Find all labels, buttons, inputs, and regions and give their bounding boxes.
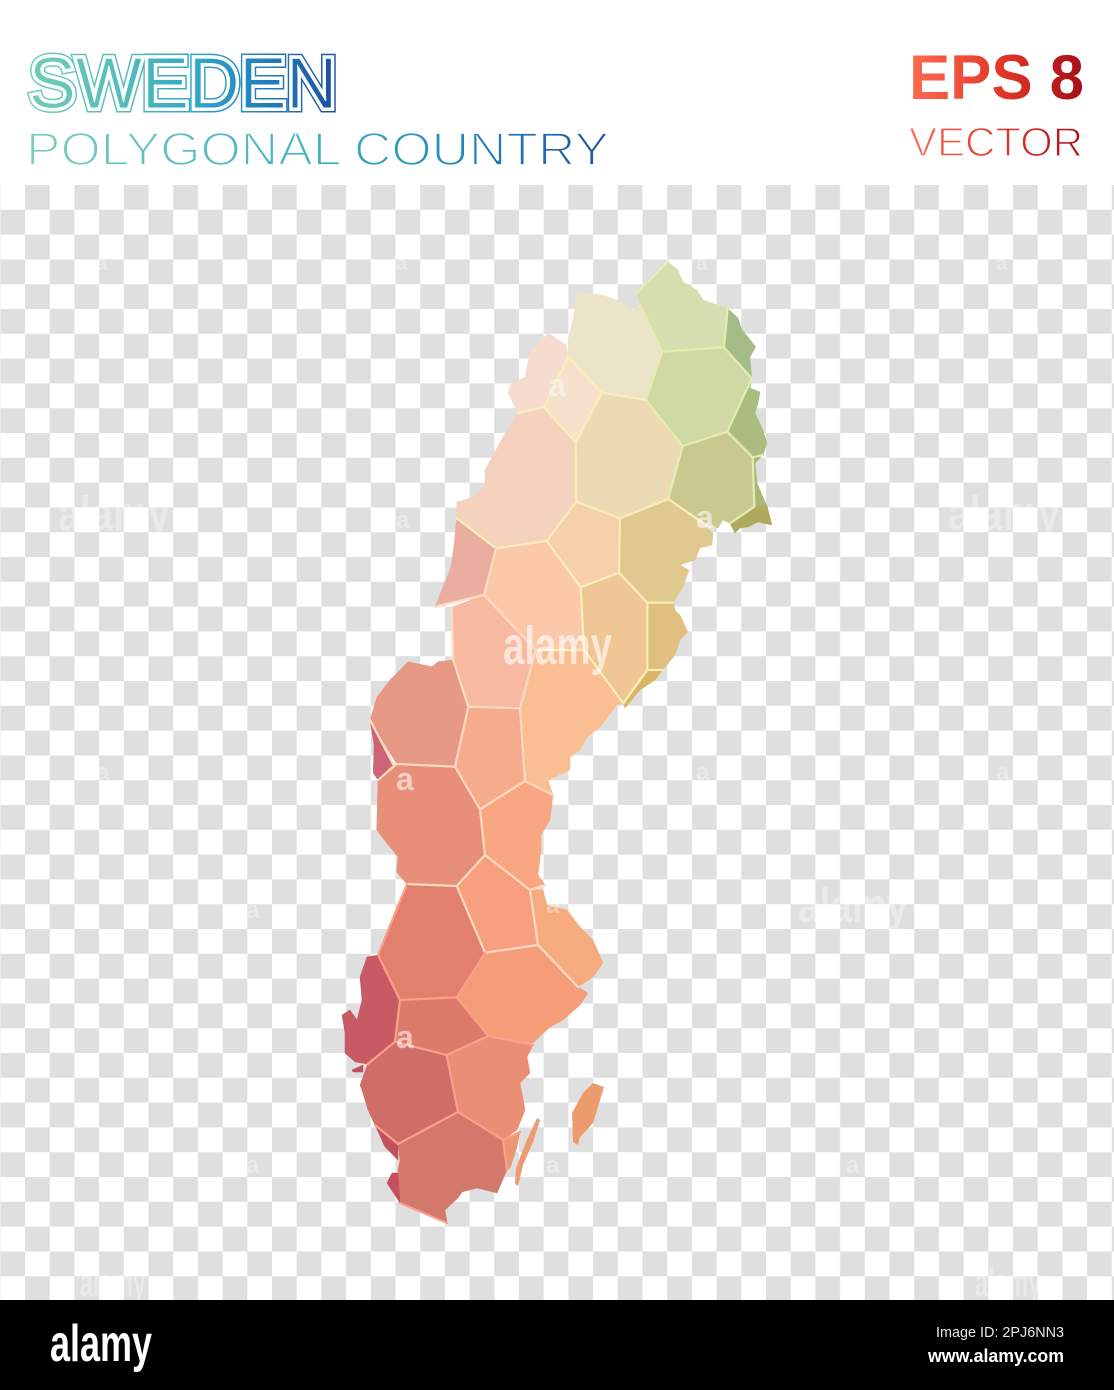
watermarks: faint repeats <box>58 253 1060 1305</box>
title: SWEDEN: SWEDEN <box>29 44 337 124</box>
watermarks: faint repeats: a <box>696 253 708 275</box>
watermarks: faint repeats: a <box>396 761 414 797</box>
watermarks: faint repeats: a <box>96 253 108 275</box>
island: Gotland <box>572 1083 604 1145</box>
watermarks: faint repeats: alamy <box>58 488 170 541</box>
island: Öland <box>515 1118 540 1186</box>
badge: EPS 8: EPS 8 <box>909 43 1084 113</box>
watermarks: faint repeats: a <box>846 1152 860 1179</box>
watermarks: faint repeats: a <box>546 1152 560 1179</box>
watermarks: faint repeats: alamy <box>975 1261 1041 1305</box>
watermarks: faint repeats: a <box>396 1019 414 1055</box>
watermarks: faint repeats: a <box>246 897 260 924</box>
badge: VECTOR: VECTOR <box>909 119 1083 165</box>
watermarks: faint repeats: a <box>548 367 566 403</box>
watermarks: faint repeats: a <box>996 253 1008 275</box>
region cells: north <box>457 262 772 548</box>
footer bar <box>0 1300 1114 1390</box>
footer: image id: Image ID: 2PJ6NN3 <box>936 1324 1064 1341</box>
polygon edges <box>368 262 763 1223</box>
watermarks: faint repeats: a <box>396 253 408 275</box>
watermarks: faint repeats: alamy <box>798 880 908 933</box>
watermarks: faint repeats: a <box>396 507 410 534</box>
watermarks: faint repeats: a <box>696 759 710 786</box>
watermarks: faint repeats: alamy <box>80 1261 146 1305</box>
watermark: central alamy: alamy <box>503 616 612 676</box>
watermarks: faint repeats: a <box>96 759 110 786</box>
title: SWEDEN: SWEDEN <box>29 44 337 124</box>
title: SWEDEN: SWEDEN <box>29 44 337 124</box>
footer: website: www.alamy.com <box>927 1346 1064 1366</box>
map: Sweden polygonal regions <box>342 262 772 1223</box>
region cells: south <box>342 884 603 1223</box>
watermarks: faint repeats: alamy <box>948 488 1060 541</box>
subtitle: POLYGONAL COUNTRY: POLYGONAL COUNTRY <box>26 123 609 175</box>
footer logo: alamy: alamy <box>50 1315 152 1373</box>
watermarks: faint repeats: a <box>996 759 1010 786</box>
region cells: centre <box>370 499 713 953</box>
watermarks: faint repeats: a <box>696 499 714 535</box>
watermarks: faint repeats: a <box>246 1152 260 1179</box>
watermarks: faint repeats: a <box>546 892 560 919</box>
